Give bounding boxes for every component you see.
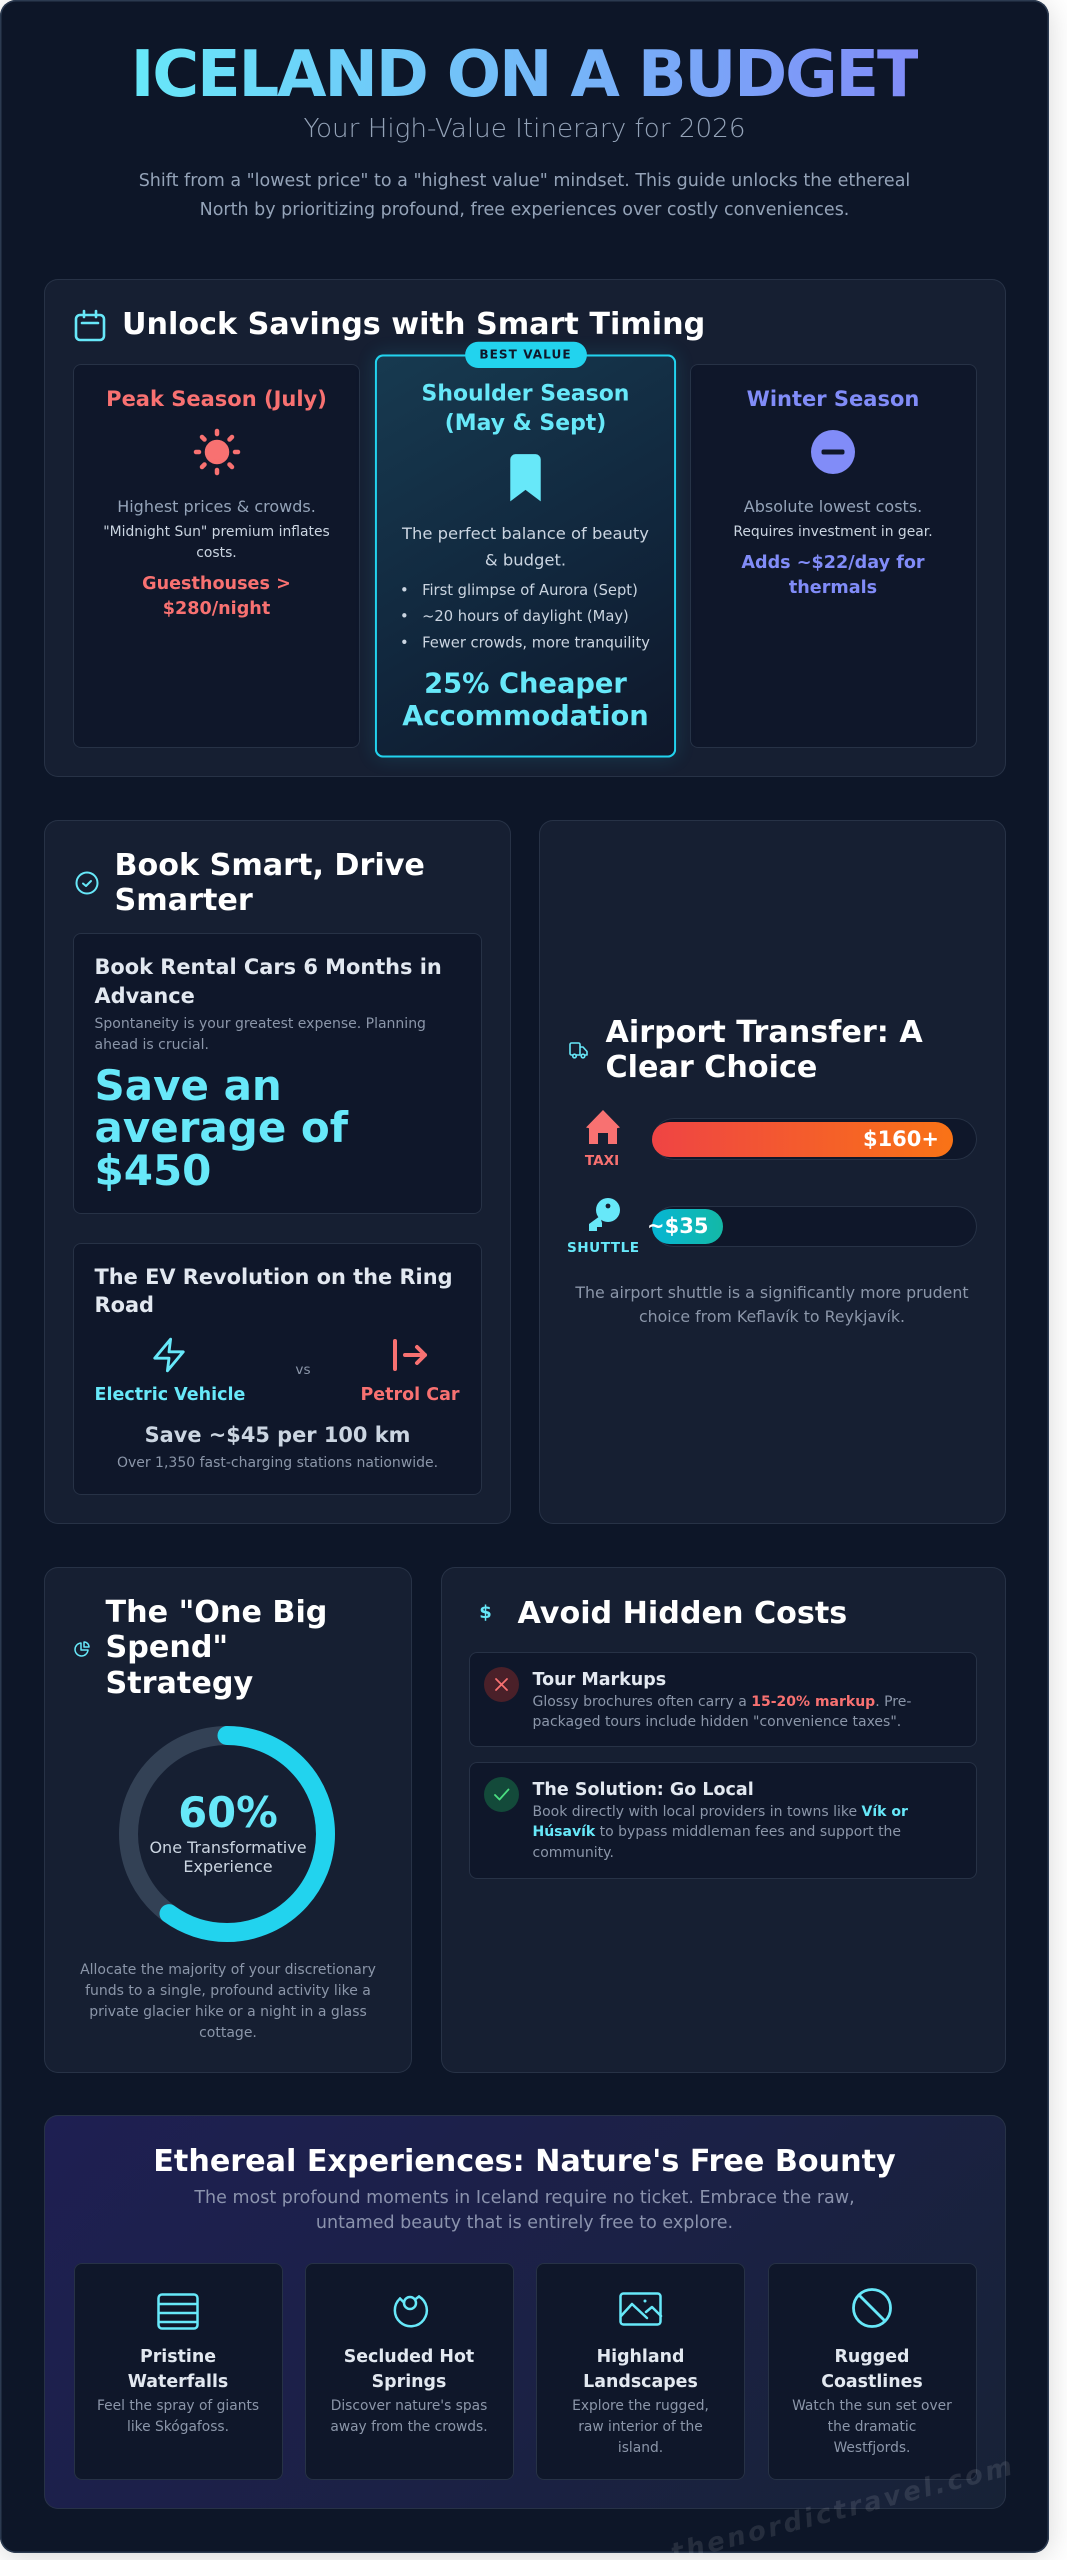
markups text bbox=[532, 1694, 911, 1730]
icon: hot spring bbox=[390, 2293, 428, 2330]
icon: cross bbox=[484, 1667, 519, 1702]
taxi label: TAXI bbox=[585, 1153, 619, 1169]
card: peak season bbox=[73, 364, 360, 748]
coastlines text bbox=[768, 2396, 976, 2458]
rental saving: average of bbox=[94, 1103, 348, 1152]
strategy text: funds to a single, profound activity like a bbox=[85, 1982, 371, 1998]
local text: community. bbox=[532, 1845, 614, 1861]
springs text: Discover nature's spas bbox=[331, 2398, 487, 2414]
heading: Strategy bbox=[106, 1666, 253, 1700]
card: winter season bbox=[690, 364, 976, 748]
strategy text: Allocate the majority of your discretionary bbox=[80, 1962, 376, 1978]
waterfalls text bbox=[74, 2396, 282, 2438]
coastlines text: Westfjords. bbox=[834, 2440, 910, 2456]
coastlines title: Coastlines bbox=[821, 2372, 923, 2392]
shoulder title: (May & Sept) bbox=[444, 410, 606, 435]
springs title bbox=[304, 2345, 514, 2394]
highlands title bbox=[536, 2345, 745, 2394]
intro text bbox=[139, 170, 910, 220]
heading: The "One Big bbox=[106, 1594, 327, 1630]
icon: sun bbox=[194, 428, 240, 476]
icon: landscape bbox=[619, 2292, 662, 2326]
icon: calendar bbox=[74, 310, 106, 342]
card: waterfalls bbox=[74, 2263, 282, 2480]
peak price: $280/night bbox=[163, 599, 270, 619]
heading bbox=[114, 848, 425, 918]
waterfalls text: like Skógafoss. bbox=[127, 2418, 229, 2434]
taxi row bbox=[584, 1110, 977, 1169]
icon: house bbox=[586, 1110, 620, 1144]
springs text bbox=[304, 2396, 514, 2438]
EV label: Electric Vehicle bbox=[94, 1385, 245, 1405]
heading: Smarter bbox=[114, 883, 253, 918]
icon: exit arrow bbox=[393, 1339, 428, 1371]
highlands text: island. bbox=[618, 2440, 663, 2456]
badge bbox=[464, 342, 586, 368]
shoulder bullet list: ~20 hours of daylight (May) bbox=[422, 608, 628, 625]
intro text: Shift from a "lowest price" to a "highest value" mindset. This guide unlocks the ethereal bbox=[139, 170, 910, 190]
rental saving: Save an bbox=[94, 1060, 282, 1110]
winter price: thermals bbox=[789, 578, 877, 598]
icon: dollar: $ bbox=[479, 1602, 492, 1623]
strategy text: private glacier hike or a night in a glass bbox=[89, 2004, 367, 2020]
taxi fill: $160+ bbox=[863, 1127, 939, 1151]
waterfalls title: Pristine bbox=[140, 2347, 216, 2367]
card: EV revolution bbox=[73, 1242, 482, 1495]
donut label: One Transformative bbox=[149, 1838, 307, 1856]
highlands title: Landscapes bbox=[583, 2372, 698, 2392]
EV saving: Save ~$45 per 100 km bbox=[145, 1422, 410, 1446]
transfer caption: The airport shuttle is a significantly more prudent bbox=[575, 1283, 969, 1302]
rental saving: $450 bbox=[94, 1146, 211, 1195]
icon: key bbox=[589, 1198, 620, 1231]
shoulder savings: 25% Cheaper bbox=[424, 668, 626, 699]
shuttle fill bbox=[652, 1209, 723, 1244]
card: hot springs bbox=[304, 2263, 514, 2480]
rental note bbox=[94, 1016, 426, 1052]
highlands text: Explore the rugged, bbox=[572, 2398, 709, 2414]
subheading: untamed beauty that is entirely free to explore. bbox=[316, 2213, 733, 2233]
winter title: Winter Season bbox=[747, 386, 919, 410]
EV title: Road bbox=[94, 1293, 154, 1317]
petrol label: Petrol Car bbox=[360, 1385, 460, 1405]
heading: Ethereal Experiences: Nature's Free Bounty bbox=[153, 2144, 896, 2178]
shuttle row bbox=[567, 1198, 977, 1256]
shoulder title: Shoulder Season bbox=[421, 380, 629, 405]
heading: Book Smart, Drive bbox=[114, 848, 425, 882]
shoulder description: & budget. bbox=[484, 550, 566, 569]
heading: Airport Transfer: A bbox=[606, 1014, 923, 1050]
winter price: Adds ~$22/day for bbox=[741, 553, 925, 573]
rental saving bbox=[94, 1060, 348, 1195]
panel: hidden costs bbox=[440, 1567, 1006, 2073]
heading bbox=[106, 1594, 327, 1700]
rental title: Advance bbox=[94, 984, 195, 1008]
shoulder title bbox=[421, 380, 629, 435]
peak note: "Midnight Sun" premium inflates bbox=[103, 524, 330, 540]
subheading bbox=[194, 2188, 855, 2233]
rental note: Spontaneity is your greatest expense. Planning bbox=[94, 1016, 426, 1032]
springs title: Secluded Hot bbox=[344, 2347, 474, 2367]
transfer caption: choice from Keflavík to Reykjavík. bbox=[639, 1307, 905, 1326]
card: rental cars bbox=[73, 933, 482, 1214]
shoulder bullet list: • bbox=[400, 634, 408, 651]
springs title: Springs bbox=[372, 2372, 446, 2392]
rental note: ahead is crucial. bbox=[94, 1036, 209, 1052]
icon: minus circle bbox=[811, 430, 855, 474]
coastlines text: Watch the sun set over bbox=[792, 2398, 952, 2414]
panel: ethereal experiences bbox=[44, 2115, 1006, 2509]
subheading: The most profound moments in Iceland require no ticket. Embrace the raw, bbox=[194, 2188, 855, 2208]
highlands text bbox=[536, 2396, 745, 2458]
markups text: Glossy brochures often carry a 15-20% markup. Pre- bbox=[532, 1694, 911, 1710]
icon: bookmark bbox=[510, 454, 541, 502]
shoulder bullet list: • bbox=[400, 582, 408, 599]
springs text: away from the crowds. bbox=[330, 2418, 488, 2434]
icon: bolt bbox=[153, 1338, 185, 1372]
vs label: vs bbox=[295, 1362, 311, 1378]
markups title: Tour Markups bbox=[532, 1670, 666, 1690]
shoulder description bbox=[402, 524, 648, 569]
title: ICELAND ON A BUDGET bbox=[131, 38, 918, 112]
peak note bbox=[103, 524, 330, 560]
coastlines text: the dramatic bbox=[828, 2418, 916, 2434]
heading bbox=[606, 1014, 923, 1085]
coastlines title: Rugged bbox=[835, 2347, 909, 2367]
shuttle label: SHUTTLE bbox=[567, 1240, 640, 1256]
shuttle fill: ~$35 bbox=[647, 1214, 708, 1238]
chargers note: Over 1,350 fast-charging stations nationwide. bbox=[117, 1454, 438, 1470]
panel: book smart bbox=[44, 820, 511, 1524]
panel: airport transfer bbox=[539, 820, 1006, 1524]
peak note: costs. bbox=[196, 544, 237, 560]
peak description: Highest prices & crowds. bbox=[117, 497, 316, 516]
transfer caption bbox=[575, 1283, 969, 1326]
donut label bbox=[149, 1838, 307, 1876]
heading: Unlock Savings with Smart Timing bbox=[122, 307, 705, 342]
donut value: 60% bbox=[178, 1788, 278, 1837]
taxi fill bbox=[652, 1122, 953, 1157]
intro text: North by prioritizing profound, free experiences over costly conveniences. bbox=[200, 200, 849, 220]
markups text: packaged tours include hidden "convenience taxes". bbox=[532, 1714, 901, 1730]
taxi bar bbox=[653, 1118, 977, 1160]
icon: check circle bbox=[76, 872, 98, 894]
local text: Húsavík to bypass middleman fees and support the bbox=[532, 1824, 901, 1840]
waterfalls title bbox=[128, 2347, 228, 2392]
waterfalls text: Feel the spray of giants bbox=[97, 2398, 259, 2414]
shoulder savings bbox=[402, 668, 648, 732]
shoulder bullet list: Fewer crowds, more tranquility bbox=[422, 634, 649, 651]
icon: pie bbox=[74, 1641, 90, 1657]
shoulder bullet list bbox=[400, 582, 650, 651]
highlands title: Highland bbox=[597, 2347, 684, 2367]
card: go local bbox=[469, 1762, 977, 1879]
shoulder savings: Accommodation bbox=[402, 701, 648, 732]
rental title bbox=[94, 955, 442, 1008]
panel: one big spend bbox=[44, 1567, 412, 2073]
highlands text: raw interior of the bbox=[578, 2418, 703, 2434]
rental title: Book Rental Cars 6 Months in bbox=[94, 955, 442, 979]
waterfalls title: Waterfalls bbox=[128, 2372, 228, 2392]
icon: check bbox=[484, 1777, 519, 1812]
shuttle bar bbox=[653, 1206, 977, 1247]
EV title: The EV Revolution on the Ring bbox=[94, 1264, 453, 1288]
winter description: Absolute lowest costs. bbox=[744, 497, 922, 516]
winter price bbox=[741, 553, 925, 598]
shoulder description: The perfect balance of beauty bbox=[402, 524, 648, 543]
card: coastlines bbox=[768, 2263, 976, 2480]
card: shoulder season bbox=[374, 354, 676, 758]
EV title bbox=[94, 1264, 453, 1317]
subtitle: Your High-Value Itinerary for 2026 bbox=[303, 114, 746, 144]
strategy text bbox=[80, 1962, 376, 2040]
shoulder bullet list: First glimpse of Aurora (Sept) bbox=[422, 582, 637, 599]
donut label: Experience bbox=[183, 1857, 273, 1876]
icon: truck bbox=[569, 1042, 588, 1059]
peak title: Peak Season (July) bbox=[106, 386, 327, 410]
peak price bbox=[142, 574, 291, 619]
shoulder bullet list: • bbox=[400, 608, 408, 625]
coastlines title bbox=[768, 2345, 976, 2394]
donut chart bbox=[119, 1726, 335, 1942]
icon: ban bbox=[852, 2288, 892, 2328]
strategy text: cottage. bbox=[199, 2024, 257, 2040]
peak price: Guesthouses > bbox=[142, 574, 291, 594]
local text: Book directly with local providers in towns like Vík or bbox=[532, 1804, 908, 1820]
badge: BEST VALUE bbox=[479, 347, 571, 362]
card: highlands bbox=[536, 2263, 745, 2480]
local text bbox=[532, 1804, 908, 1861]
winter note: Requires investment in gear. bbox=[733, 524, 933, 540]
local title: The Solution: Go Local bbox=[532, 1780, 754, 1800]
heading: Spend" bbox=[106, 1630, 228, 1665]
heading: Clear Choice bbox=[606, 1050, 817, 1085]
heading: Avoid Hidden Costs bbox=[518, 1596, 847, 1630]
icon: waterfall bbox=[157, 2293, 199, 2330]
card: tour markups bbox=[469, 1652, 977, 1747]
panel: smart timing bbox=[44, 279, 1006, 777]
